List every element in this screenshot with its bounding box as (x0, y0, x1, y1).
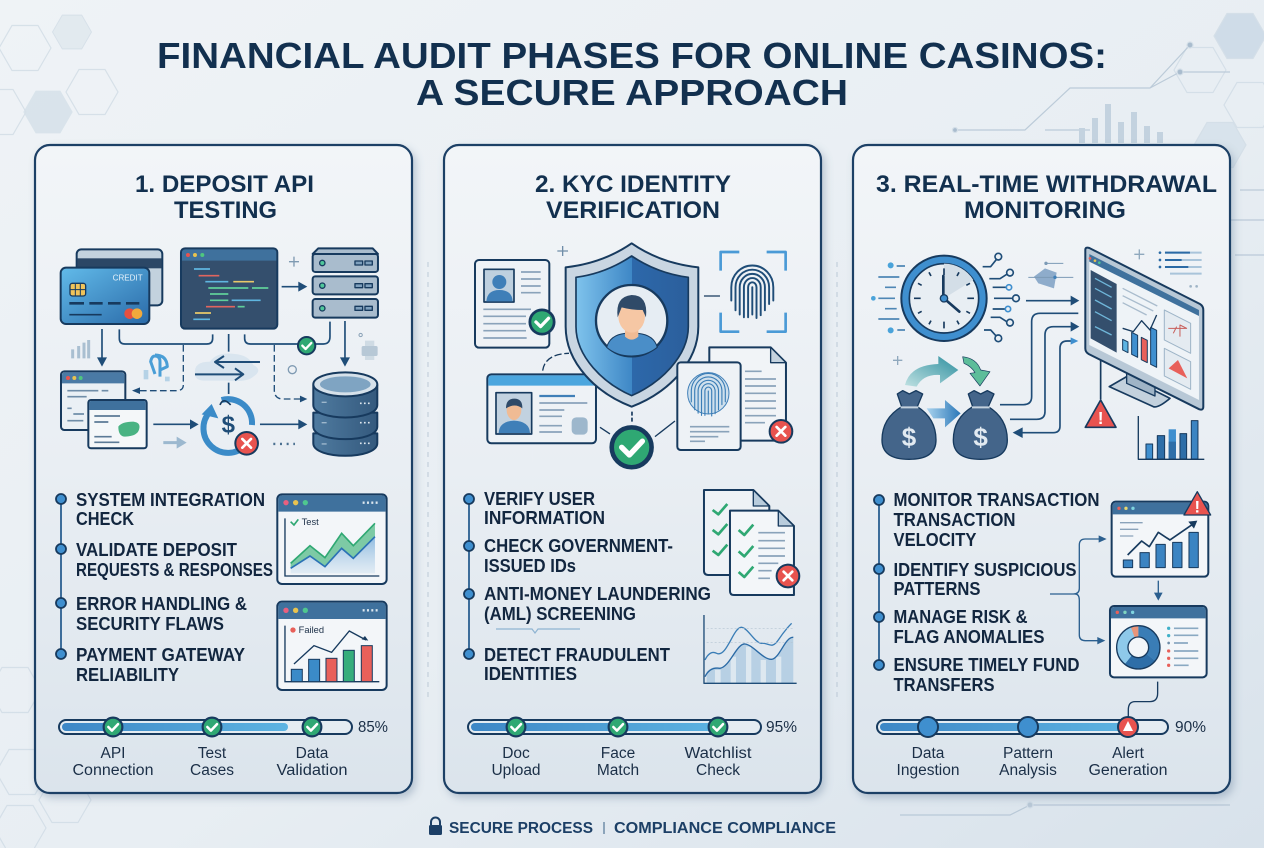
progress bar: 85%: 85% (358, 719, 388, 736)
bullet list: PAYMENT GATEWAY (76, 644, 246, 665)
icon: fingerprint scan (704, 252, 786, 332)
icon: warning triangle (1085, 400, 1116, 428)
icon: faint small decorations (73, 257, 378, 449)
footer (429, 818, 836, 837)
footer text: SECURE PROCESS (449, 820, 593, 837)
bullet list: TRANSFERS (894, 674, 994, 695)
icon: verification check (612, 427, 652, 467)
heading: deposit API testing: TESTING (174, 197, 277, 224)
progress bar: 90%: Data (912, 745, 945, 762)
icon: monitor dashboard (1085, 248, 1203, 410)
bullet list: SYSTEM INTEGRATION (76, 489, 265, 510)
icon: clock (901, 256, 987, 341)
chart: fraud trend lines (704, 615, 797, 683)
bullet list: MONITOR TRANSACTION (894, 489, 1100, 510)
progress bar: 85% (59, 718, 388, 779)
icon: faint map marks (893, 249, 1202, 365)
progress bar: 85%: Test (198, 745, 227, 762)
progress bar: 95% (468, 718, 797, 779)
illustration: API flow diagram (61, 248, 378, 456)
progress bar: 95%: Check (696, 762, 740, 779)
panel: deposit API testing (35, 145, 412, 793)
footer text (449, 820, 836, 837)
bullet list: PATTERNS (894, 578, 980, 599)
icon: credit cards: CREDIT (113, 274, 143, 283)
icon: checklist documents (704, 490, 799, 595)
icon: flow arrows to monitor (1000, 301, 1101, 433)
heading: real-time withdrawal monitoring (876, 171, 1217, 224)
progress bar: 90%: Analysis (999, 762, 1057, 779)
bullet list (464, 488, 711, 684)
connector lines and arrows (102, 287, 345, 444)
chart: velocity window (1112, 492, 1211, 577)
illustration: withdrawal monitoring (871, 248, 1204, 459)
bullet list: MANAGE RISK & (894, 606, 1028, 627)
heading: KYC identity verification: 2. KYC IDENTITY (535, 171, 731, 198)
progress bar: 90%: 90% (1175, 719, 1206, 736)
chart: failed (277, 602, 387, 690)
chart: velocity window: ! (1195, 497, 1200, 516)
bullet list: FLAG ANOMALIES (894, 626, 1044, 647)
icon: fingerprint documents (677, 347, 792, 450)
bullet list: CHECK GOVERNMENT- (484, 535, 673, 556)
icon: shield with user (566, 243, 698, 407)
bullet list: ANTI-MONEY LAUNDERING (484, 583, 711, 604)
bullet list: IDENTITIES (484, 663, 577, 684)
bullet list: IDENTIFY SUSPICIOUS (894, 559, 1076, 580)
panel: KYC identity verification (444, 145, 821, 793)
icon: money bags and arrows: $ (973, 422, 988, 452)
progress bar: 85%: API (101, 745, 125, 762)
icon: money bags and arrows: $ (902, 422, 917, 452)
bullet list: ENSURE TIMELY FUND (894, 654, 1080, 675)
progress bar: 95%: Match (597, 762, 639, 779)
title: FINANCIAL AUDIT PHASES FOR ONLINE CASINOS: (157, 35, 1107, 76)
heading: real-time withdrawal monitoring: 3. REAL-TIME WITHDRAWAL (876, 171, 1217, 198)
bullet list: (AML) SCREENING (484, 603, 636, 624)
title (157, 35, 1107, 113)
progress bar: 85%: Connection (72, 762, 154, 779)
progress bar: 95%: Face (601, 745, 635, 762)
illustration: identity shield (475, 243, 792, 467)
progress bar: 90%: Alert (1112, 745, 1145, 762)
heading: deposit API testing: 1. DEPOSIT API (135, 171, 314, 198)
icon: check badge (298, 337, 315, 354)
icon: ID card (487, 374, 596, 443)
bullet list: INFORMATION (484, 507, 605, 528)
icon: dollar refresh cycle (202, 399, 258, 455)
progress bar: 95%: 95% (766, 719, 797, 736)
chart: failed: Failed (299, 625, 324, 635)
chart: test (277, 494, 387, 584)
bullet list: RELIABILITY (76, 664, 180, 685)
progress bar: 90%: Generation (1088, 762, 1168, 779)
bullet list: REQUESTS & RESPONSES (76, 559, 273, 580)
heading: KYC identity verification: VERIFICATION (546, 197, 720, 224)
heading: KYC identity verification (535, 171, 731, 224)
panel: real-time withdrawal monitoring (853, 145, 1230, 793)
icon: code window (181, 248, 277, 329)
chart: pie window (1110, 606, 1207, 677)
icon: credit cards (61, 249, 162, 324)
mini graphics: checklist and line chart (704, 490, 799, 683)
bullet list: VALIDATE DEPOSIT (76, 539, 238, 560)
icon: money bags and arrows (882, 356, 1007, 459)
bullet list: ISSUED IDs (484, 555, 576, 576)
icon: profile document (475, 260, 554, 348)
bullet list: TRANSACTION (894, 509, 1016, 530)
title: A SECURE APPROACH (416, 72, 848, 113)
mini dashboards (1050, 492, 1211, 718)
footer text: COMPLIANCE COMPLIANCE (614, 820, 836, 837)
icon: warning triangle: ! (1098, 408, 1104, 428)
progress bar: 85%: Cases (190, 762, 234, 779)
chart: test: Test (302, 517, 319, 527)
progress bar: 90% (877, 717, 1206, 779)
bullet list: CHECK (76, 508, 135, 529)
icon: server rack (313, 248, 378, 318)
bullet list (874, 489, 1100, 695)
icon: browser windows (61, 371, 147, 448)
icon: clock data lines (871, 253, 1019, 342)
icon: lock (429, 818, 442, 835)
progress bar: 85%: Validation (276, 762, 348, 779)
icon: bar chart (1138, 416, 1204, 459)
icon: plus and connectors (543, 246, 675, 437)
progress bar: 90%: Ingestion (897, 762, 959, 779)
connector lines (1050, 539, 1158, 718)
heading: deposit API testing (135, 171, 314, 224)
bullet list: DETECT FRAUDULENT (484, 644, 671, 665)
bullet list: VELOCITY (894, 529, 977, 550)
progress bar: 95%: Watchlist (684, 745, 752, 762)
icon: dollar refresh cycle: $ (222, 412, 235, 439)
icon: database (313, 372, 377, 456)
progress bar: 90%: Pattern (1003, 745, 1053, 762)
heading: real-time withdrawal monitoring: MONITORING (964, 197, 1126, 224)
mini charts: test and failed windows (277, 494, 387, 690)
bullet list: ERROR HANDLING & (76, 593, 247, 614)
bullet list (56, 489, 273, 685)
progress bar: 85%: Data (296, 745, 329, 762)
bullet list: VERIFY USER (484, 488, 595, 509)
bullet list: SECURITY FLAWS (76, 613, 224, 634)
progress bar: 95%: Upload (491, 762, 541, 779)
progress bar: 95%: Doc (502, 745, 530, 762)
